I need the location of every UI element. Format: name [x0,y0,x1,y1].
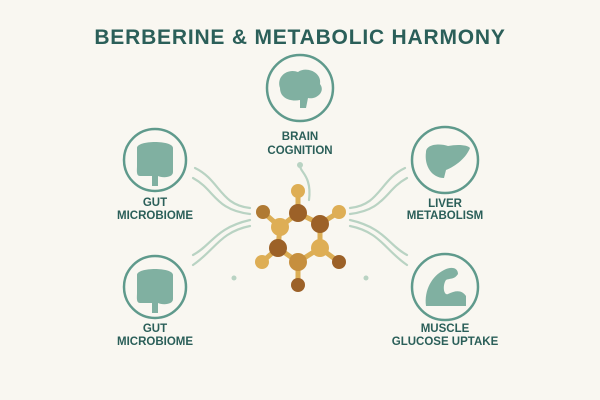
node: muscle: GLUCOSE UPTAKE [392,336,499,348]
node: gut top: MICROBIOME [117,210,193,222]
node: brain: BRAIN [282,131,318,143]
icon: liver [426,144,470,178]
node: gut top: GUT [143,197,167,209]
icon: arm [426,268,466,306]
node: liver [407,127,483,222]
node: muscle: MUSCLE [421,323,470,335]
icon: intestine [137,142,173,186]
node: gut bottom: MICROBIOME [117,336,193,348]
node: gut bottom: GUT [143,323,167,335]
node: gut bottom [117,256,193,348]
molecule [255,184,346,292]
node: liver: LIVER [428,198,463,210]
node: muscle [392,254,499,348]
node: liver: METABOLISM [407,210,483,222]
node: brain: COGNITION [267,145,333,157]
title: BERBERINE & METABOLIC HARMONY [94,26,506,49]
connector waves [193,166,407,265]
node: gut top [117,129,193,222]
icon: intestine [137,269,173,313]
dots [232,162,368,280]
node: brain [267,55,333,157]
icon: brain [279,70,322,108]
